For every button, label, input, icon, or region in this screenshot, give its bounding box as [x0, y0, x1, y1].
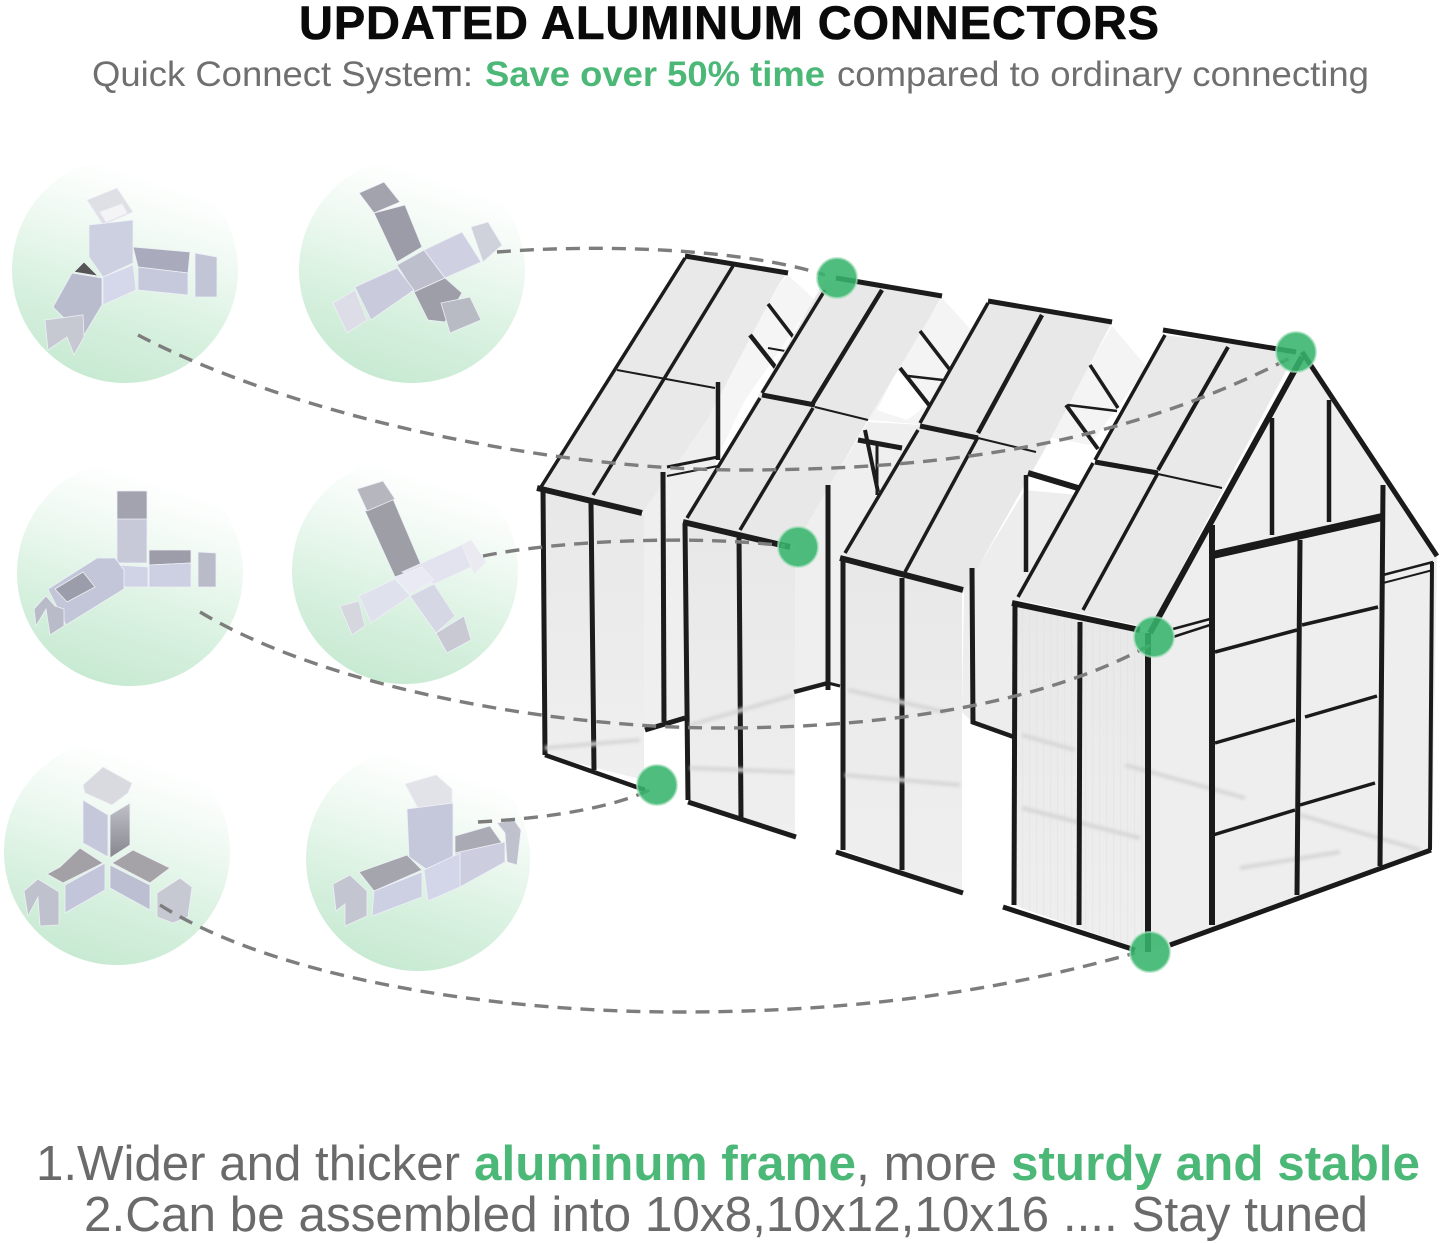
green hotspot markers — [637, 258, 1316, 972]
subtitle: Save over 50% time — [485, 54, 825, 94]
circle: connector 1 — [12, 157, 238, 383]
circle: connector 2 — [299, 157, 525, 383]
section 1: roof and wall — [537, 256, 794, 790]
subtitle: Quick Connect System: — [92, 54, 473, 94]
bottom text line 1: sturdy and stable — [1011, 1137, 1420, 1191]
background wall sheets — [643, 275, 1147, 737]
subtitle — [92, 54, 1369, 94]
section 3: roof and wall — [836, 301, 1118, 893]
circle: connector 4 — [292, 458, 518, 684]
circle: connector 5 — [4, 739, 230, 965]
hinge bracket — [858, 430, 902, 495]
bottom text line 1: 1.Wider and thicker — [36, 1137, 460, 1191]
dashed leader lines — [138, 248, 1290, 1012]
circle: connector 6 — [306, 747, 530, 971]
section 2: roof and wall — [683, 278, 950, 840]
subtitle: compared to ordinary connecting — [837, 54, 1369, 94]
circle: connector 3 — [17, 460, 243, 686]
bottom text line 1: aluminum frame — [474, 1137, 856, 1191]
exploded greenhouse illustration — [537, 256, 1437, 952]
section 4: front greenhouse — [545, 330, 1437, 952]
bottom text line 1: , more — [856, 1137, 997, 1191]
bottom text line 1 — [36, 1137, 1420, 1191]
connector photo circles — [4, 157, 530, 971]
bottom text line 2: 2.Can be assembled into 10x8,10x12,10x16 .... Stay tuned — [84, 1188, 1368, 1242]
ghost floor lines — [545, 690, 1420, 868]
